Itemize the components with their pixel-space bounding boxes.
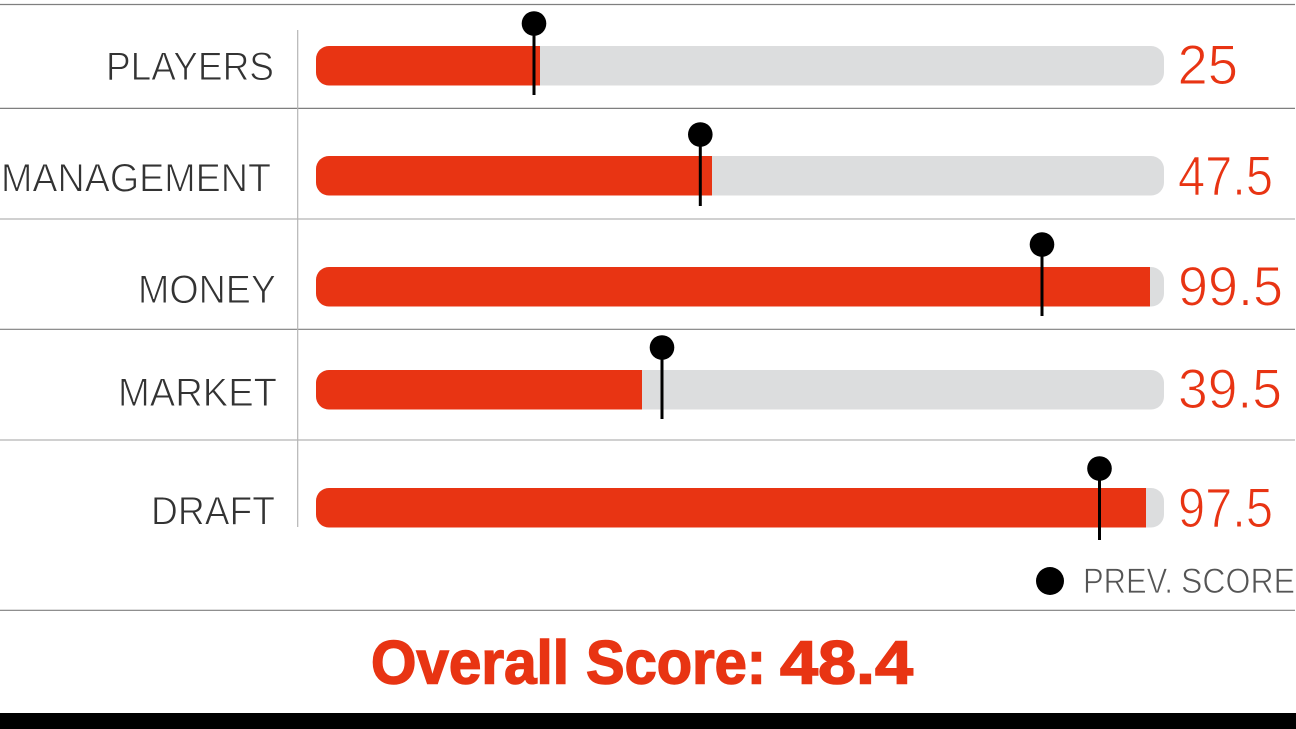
value: management: 47.5 <box>1178 145 1273 207</box>
bar track: market <box>316 370 1164 410</box>
label: market: MARKET <box>118 371 277 415</box>
previous score pin: market <box>650 335 674 419</box>
bar track: management <box>316 156 1164 196</box>
row: management <box>1 122 1273 207</box>
row: draft <box>151 456 1273 540</box>
value: draft: 97.5 <box>1178 477 1273 539</box>
bar fill: players <box>316 46 540 86</box>
label: draft: DRAFT <box>151 490 275 534</box>
row: market <box>118 335 1282 420</box>
previous score pin: management <box>688 122 713 206</box>
legend marker <box>1036 567 1064 595</box>
legend: previous score <box>1036 561 1295 601</box>
value: players: 25 <box>1178 34 1238 96</box>
bar fill: market <box>316 370 642 410</box>
bar fill: draft <box>316 488 1146 528</box>
overall score: Overall <box>371 628 569 696</box>
overall score: Score: <box>586 628 766 696</box>
value: money: 99.5 <box>1178 256 1283 318</box>
footer bar <box>0 713 1296 729</box>
previous score pin: draft <box>1087 456 1112 540</box>
label: money: MONEY <box>138 268 276 312</box>
previous score pin: money <box>1030 232 1054 316</box>
previous score pin: players <box>522 11 546 95</box>
label: players: PLAYERS <box>106 45 274 89</box>
bar fill: management <box>316 156 712 196</box>
row: money <box>138 232 1283 318</box>
label: management: MANAGEMENT <box>1 156 271 200</box>
value: market: 39.5 <box>1178 358 1282 420</box>
bar fill: money <box>316 267 1150 306</box>
row: players <box>106 11 1238 96</box>
bar track: players <box>316 46 1164 86</box>
bar track: draft <box>316 488 1164 528</box>
bar track: money <box>316 267 1164 306</box>
legend label: PREV. <box>1083 561 1173 601</box>
overall score: 48.4 <box>780 628 913 696</box>
